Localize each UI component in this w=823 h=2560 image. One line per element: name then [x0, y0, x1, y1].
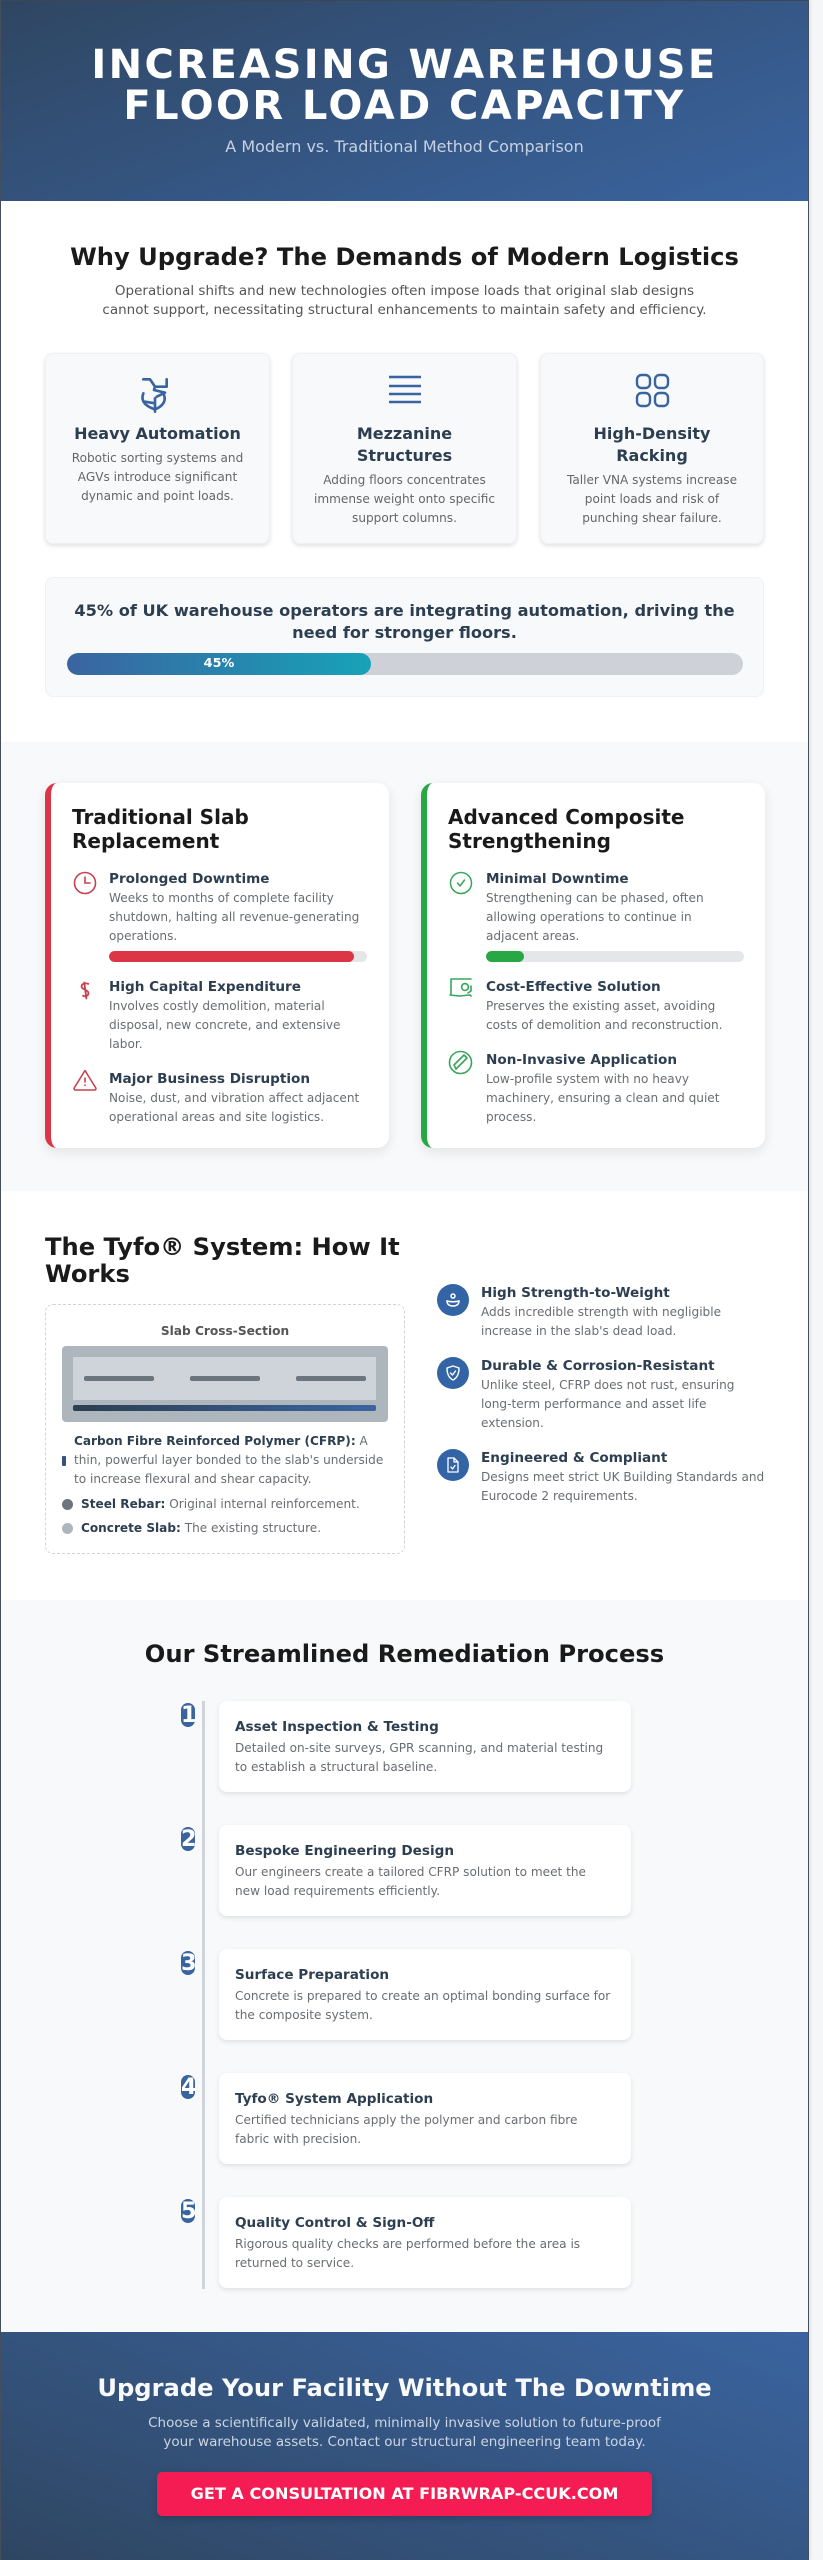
- legend: concrete text: Concrete Slab: The existing structure.: [81, 1521, 321, 1535]
- step text: fabric with precision.: [235, 2132, 361, 2146]
- item text: Low-profile system with no heavy: [486, 1072, 689, 1086]
- step text: to establish a structural baseline.: [235, 1760, 437, 1774]
- icon circle: weight: [437, 1284, 469, 1316]
- step text: the composite system.: [235, 2008, 373, 2022]
- legend: cfrp text: thin, powerful layer bonded to the slab's underside: [74, 1453, 383, 1467]
- legend: rebar dot: [62, 1499, 73, 1510]
- legend: concrete dot: [62, 1523, 73, 1534]
- bar fill: [486, 951, 524, 962]
- panel: advanced composite strengthening: [421, 783, 765, 1148]
- item title: High Capital Expenditure: [109, 979, 301, 995]
- section: why upgrade: [70, 243, 739, 318]
- title: [91, 42, 718, 128]
- concrete layer: [73, 1357, 376, 1400]
- title: FLOOR LOAD CAPACITY: [123, 82, 686, 128]
- benefit: engineered: [437, 1449, 777, 1506]
- item text: Strengthening can be phased, often: [486, 891, 704, 905]
- legend: cfrp text: [74, 1434, 383, 1486]
- stat text: need for stronger floors.: [292, 622, 517, 642]
- diagram panel: slab cross-section: [45, 1304, 405, 1554]
- benefit title: Engineered & Compliant: [481, 1450, 667, 1466]
- step text: Certified technicians apply the polymer and carbon fibre: [235, 2113, 577, 2127]
- card: heavy automation: [45, 353, 270, 544]
- intro text: [102, 283, 707, 318]
- cta button: [157, 2472, 652, 2516]
- card title: Mezzanine: [357, 424, 452, 443]
- step title: Quality Control & Sign-Off: [235, 2215, 434, 2231]
- stat text: [74, 601, 735, 642]
- item text: costs of demolition and reconstruction.: [486, 1018, 723, 1032]
- icon: robot arm: [141, 378, 168, 413]
- icon: check circle: [450, 872, 472, 894]
- benefit: durable: [437, 1357, 734, 1430]
- icon: weight: [446, 1293, 460, 1307]
- bar 95%: [109, 951, 367, 962]
- legend: cfrp text: to increase flexural and shear capacity.: [74, 1472, 311, 1486]
- card text: punching shear failure.: [582, 511, 722, 525]
- item: prolonged downtime: [74, 871, 367, 962]
- intro text: cannot support, necessitating structural enhancements to maintain safety and efficiency.: [102, 302, 707, 318]
- intro text: Operational shifts and new technologies often impose loads that original slab designs: [115, 283, 694, 299]
- card text: [566, 473, 737, 525]
- panel heading: Replacement: [72, 829, 219, 853]
- card text: immense weight onto specific: [314, 492, 495, 506]
- card text: dynamic and point loads.: [81, 489, 234, 503]
- step title: Tyfo® System Application: [235, 2091, 433, 2107]
- slab diagram: [62, 1346, 388, 1422]
- step text: [235, 1863, 586, 1901]
- card title: [357, 424, 452, 464]
- item: cost-effective solution: [449, 978, 723, 1032]
- benefit text: increase in the slab's dead load.: [481, 1324, 676, 1338]
- stat panel: [45, 577, 764, 697]
- card text: [314, 473, 495, 525]
- item text: disposal, new concrete, and extensive: [109, 1018, 340, 1032]
- item text: [486, 1072, 720, 1124]
- item title: Minimal Downtime: [486, 871, 629, 887]
- panel heading: Advanced Composite: [448, 805, 684, 829]
- card: mezzanine structures: [292, 353, 517, 544]
- cfrp layer: [73, 1405, 376, 1411]
- benefit text: [481, 1468, 764, 1506]
- card text: Robotic sorting systems and: [72, 451, 243, 465]
- step title: Surface Preparation: [235, 1967, 389, 1983]
- icon: slashed circle: [448, 1050, 472, 1074]
- progress fill: [67, 653, 371, 675]
- card text: Taller VNA systems increase: [567, 473, 737, 487]
- panel heading: Strengthening: [448, 829, 611, 853]
- heading: process: Our Streamlined Remediation Process: [145, 1640, 664, 1668]
- step title: Asset Inspection & Testing: [235, 1719, 439, 1735]
- step text: [235, 1739, 603, 1777]
- benefit text: long-term performance and asset life: [481, 1397, 706, 1411]
- item text: Noise, dust, and vibration affect adjacent: [109, 1091, 359, 1105]
- item title: Major Business Disruption: [109, 1071, 310, 1087]
- icon: warning: [73, 1070, 97, 1091]
- panel heading: [448, 805, 684, 853]
- item text: machinery, ensuring a clean and quiet: [486, 1091, 719, 1105]
- item text: Weeks to months of complete facility: [109, 891, 334, 905]
- card: high-density racking: [540, 353, 764, 544]
- item text: [109, 1091, 359, 1124]
- item: minimal downtime: [450, 871, 744, 962]
- step text: [235, 2111, 577, 2149]
- card title: Racking: [616, 446, 688, 464]
- rebar 2: [190, 1376, 260, 1381]
- card text: AGVs introduce significant: [78, 470, 237, 484]
- legend: cfrp swatch: [62, 1456, 66, 1466]
- icon: document: [446, 1457, 460, 1473]
- panel heading: [72, 805, 249, 853]
- bar 15%: [486, 951, 744, 962]
- timeline line: [202, 1701, 205, 2289]
- cta heading: Upgrade Your Facility Without The Downtime: [97, 2374, 712, 2402]
- panel heading: Traditional Slab: [72, 805, 249, 829]
- bar fill: [109, 951, 354, 962]
- rebar 1: [84, 1376, 154, 1381]
- item text: [486, 891, 704, 943]
- benefit text: Adds incredible strength with negligible: [481, 1305, 721, 1319]
- section band: comparison: [1, 742, 808, 1191]
- item text: Preserves the existing asset, avoiding: [486, 999, 715, 1013]
- item: major business disruption: [73, 1070, 359, 1124]
- benefit text: Unlike steel, CFRP does not rust, ensuring: [481, 1378, 734, 1392]
- step text: Rigorous quality checks are performed before the area is: [235, 2237, 580, 2251]
- item: non-invasive application: [448, 1050, 720, 1124]
- icon: banknote: [449, 978, 472, 997]
- legend: cfrp text: Carbon Fibre Reinforced Polymer (CFRP): A: [74, 1434, 368, 1448]
- step text: [235, 1987, 610, 2025]
- card text: [72, 451, 243, 503]
- item: high capital expenditure: [80, 979, 340, 1051]
- diagram title: Slab Cross-Section: [161, 1324, 289, 1338]
- icon: grid: [636, 374, 670, 408]
- item text: Involves costly demolition, material: [109, 999, 325, 1013]
- item text: allowing operations to continue in: [486, 910, 692, 924]
- benefit text: [481, 1305, 721, 1338]
- item text: operational areas and site logistics.: [109, 1110, 324, 1124]
- step text: [235, 2235, 580, 2273]
- item text: adjacent areas.: [486, 929, 579, 943]
- step 1: [219, 1701, 631, 1792]
- icon: layers: [389, 376, 421, 404]
- item text: [109, 891, 359, 943]
- icon: dollar: [80, 982, 90, 1000]
- item text: shutdown, halting all revenue-generating: [109, 910, 359, 924]
- benefit text: [481, 1376, 734, 1433]
- item text: [486, 999, 723, 1032]
- legend: rebar text: Steel Rebar: Original internal reinforcement.: [81, 1497, 360, 1511]
- step text: Our engineers create a tailored CFRP solution to meet the: [235, 1865, 586, 1879]
- step text: new load requirements efficiently.: [235, 1884, 440, 1898]
- step 5: [219, 2197, 631, 2288]
- subtitle: A Modern vs. Traditional Method Comparison: [225, 137, 584, 156]
- step text: Detailed on-site surveys, GPR scanning, and material testing: [235, 1741, 603, 1755]
- card text: point loads and risk of: [585, 492, 719, 506]
- stat text: 45% of UK warehouse operators are integrating automation, driving the: [74, 601, 735, 620]
- item text: process.: [486, 1110, 536, 1124]
- heading: tyfo system: Works: [45, 1260, 130, 1288]
- icon: clock: [74, 872, 96, 894]
- benefit text: Designs meet strict UK Building Standards and: [481, 1470, 764, 1484]
- progress fill: 45%: [204, 656, 234, 671]
- header banner: [1, 0, 808, 201]
- heading: tyfo system: The Tyfo® System: How It: [45, 1233, 400, 1261]
- item text: labor.: [109, 1037, 143, 1051]
- item title: Cost-Effective Solution: [486, 979, 661, 995]
- call to action: [1, 2332, 808, 2560]
- item text: operations.: [109, 929, 177, 943]
- icon: shield: [445, 1365, 461, 1381]
- section: remediation process: [1, 1600, 808, 2332]
- benefit title: Durable & Corrosion-Resistant: [481, 1358, 715, 1374]
- icon circle: shield: [437, 1357, 469, 1389]
- card title: [594, 424, 710, 464]
- item title: Prolonged Downtime: [109, 871, 270, 887]
- step title: Bespoke Engineering Design: [235, 1843, 454, 1859]
- item title: Non-Invasive Application: [486, 1052, 677, 1068]
- benefit text: extension.: [481, 1416, 544, 1430]
- progress bar 45%: [67, 653, 743, 675]
- title: INCREASING WAREHOUSE: [91, 42, 718, 88]
- card title: Heavy Automation: [74, 424, 241, 443]
- panel: traditional slab replacement: [45, 783, 389, 1148]
- cta button: GET A CONSULTATION AT FIBRWRAP-CCUK.COM: [191, 2484, 618, 2503]
- heading: why upgrade: Why Upgrade? The Demands of Modern Logistics: [70, 243, 739, 271]
- benefit: high strength-to-weight: [437, 1284, 721, 1338]
- step 3: [219, 1949, 631, 2040]
- cta text: [1, 2414, 808, 2452]
- step 4: [219, 2073, 631, 2164]
- card title: Structures: [357, 446, 452, 464]
- card text: support columns.: [352, 511, 457, 525]
- rebar 3: [296, 1376, 366, 1381]
- cta text: your warehouse assets. Contact our structural engineering team today.: [163, 2434, 646, 2450]
- benefit text: Eurocode 2 requirements.: [481, 1489, 638, 1503]
- icon circle: document: [437, 1449, 469, 1481]
- heading: tyfo system: [45, 1233, 400, 1288]
- benefit title: High Strength-to-Weight: [481, 1285, 670, 1301]
- card title: High-Density: [594, 424, 710, 443]
- item text: [109, 999, 340, 1051]
- step text: returned to service.: [235, 2256, 354, 2270]
- cta text: Choose a scientifically validated, minimally invasive solution to future-proof: [148, 2415, 661, 2431]
- step 2: [219, 1825, 631, 1916]
- card text: Adding floors concentrates: [323, 473, 486, 487]
- step text: Concrete is prepared to create an optimal bonding surface for: [235, 1989, 610, 2003]
